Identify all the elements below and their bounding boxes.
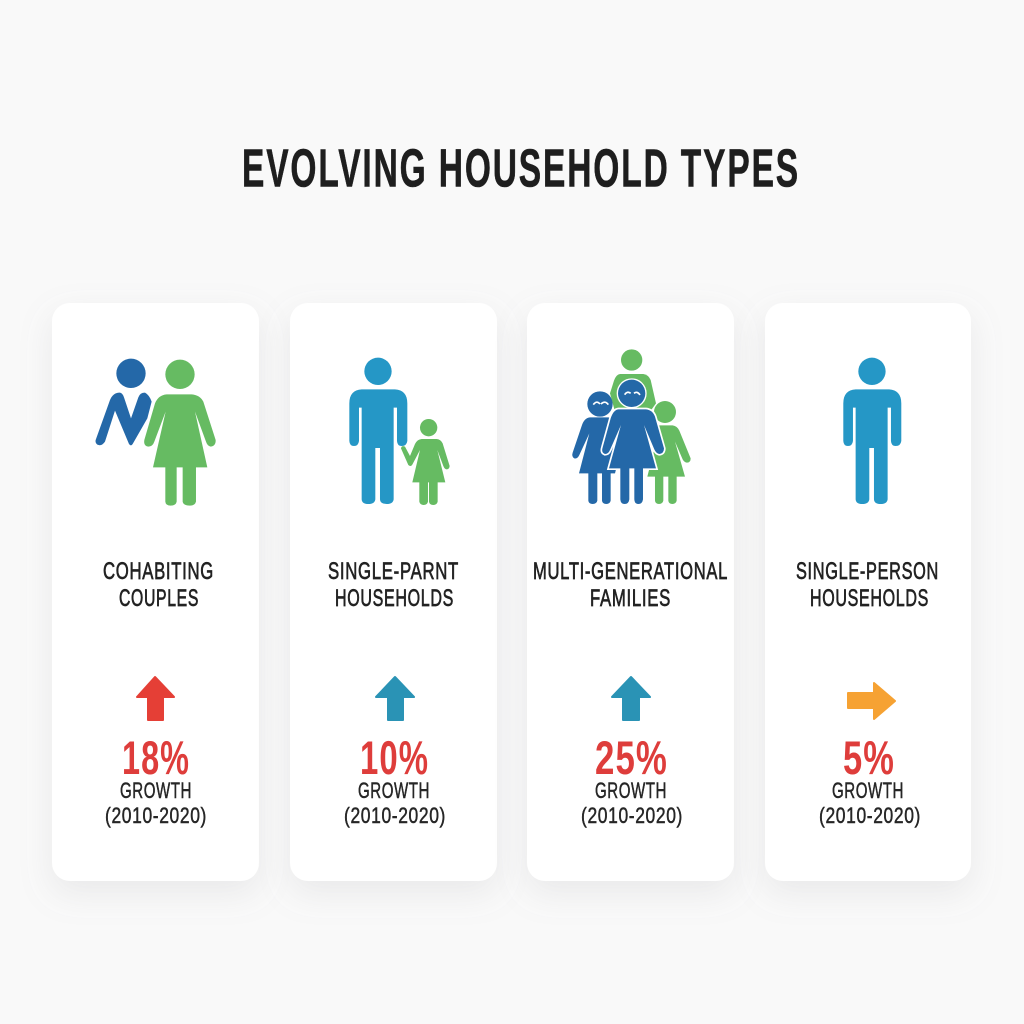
stat: GROWTH [358,778,430,803]
panel: single-parent households [290,303,497,881]
panel: multi-generational families [527,303,734,881]
icon: couple [96,359,216,506]
arrow: up teal [376,677,414,720]
panel: single-person households [765,303,971,881]
card background [290,303,497,881]
stat: GROWTH [832,778,904,803]
card background [527,303,734,881]
arrow: up teal [612,677,650,720]
label: HOUSEHOLDS [810,585,929,612]
arrow: right orange [848,683,895,719]
label: MULTI-GENERATIONAL [533,558,728,585]
stat: (2010-2020) [581,803,683,828]
card background [765,303,971,881]
stat [105,731,207,828]
icon: single person [843,358,901,504]
label: FAMILIES [590,585,671,612]
label: COUPLES [119,585,199,612]
stat: GROWTH [595,778,667,803]
label: HOUSEHOLDS [335,585,454,612]
label [796,558,939,612]
arrow: up red [137,677,174,720]
stat [344,731,446,828]
stat: 5% [843,731,895,784]
stat [819,731,921,828]
stat [581,731,683,828]
label [533,558,728,612]
label [328,558,459,612]
label: SINGLE-PERSON [796,558,939,585]
stat: 25% [595,731,668,784]
label [103,558,214,612]
stat: (2010-2020) [344,803,446,828]
card background [52,303,259,881]
stat: GROWTH [120,778,192,803]
stat: (2010-2020) [105,803,207,828]
stat: 10% [360,731,429,784]
stat: (2010-2020) [819,803,921,828]
icon: parent and child [349,358,450,505]
panel: cohabiting couples [52,303,259,881]
label: COHABITING [103,558,214,585]
label: SINGLE-PARNT [328,558,459,585]
icon: family [572,349,691,504]
stat: 18% [122,731,190,784]
